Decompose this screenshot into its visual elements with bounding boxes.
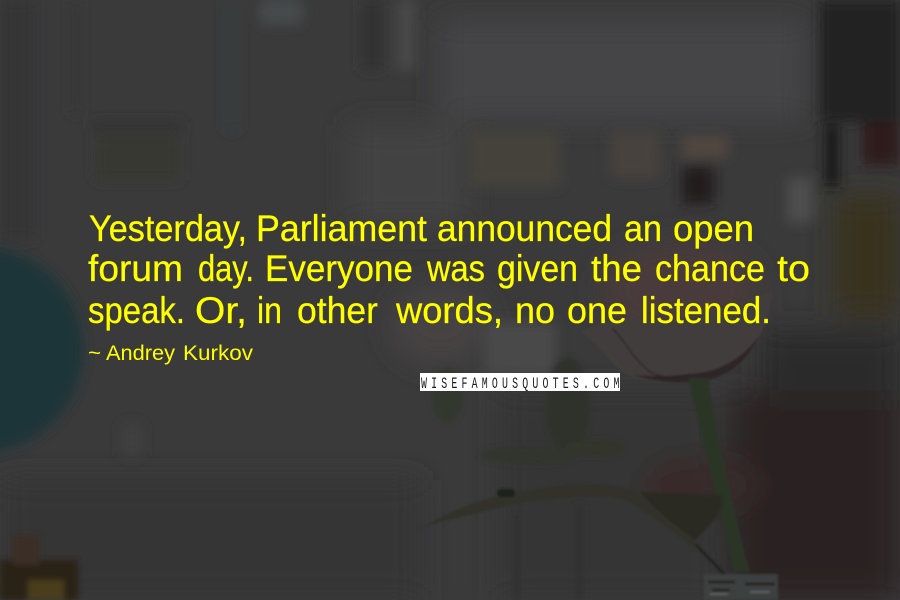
blurred leaves xyxy=(431,357,625,600)
quote text: announced xyxy=(437,208,612,249)
thorny branch with leaf xyxy=(417,484,725,575)
quote text xyxy=(88,208,810,331)
quote text: the xyxy=(591,248,642,289)
quote text: open xyxy=(673,208,754,249)
watermark: WISEFAMOUSQUOTES.COM xyxy=(421,375,619,393)
quote text: words, xyxy=(395,290,503,331)
quote text: given xyxy=(497,248,578,289)
quote text: other xyxy=(297,290,378,331)
quote text: chance xyxy=(655,248,765,289)
quote text: speak. xyxy=(88,290,185,331)
attribution: Andrey xyxy=(106,342,176,365)
attribution: ~ xyxy=(88,342,101,365)
teal sphere at left edge xyxy=(0,247,83,453)
quote text: forum xyxy=(88,248,183,289)
attribution xyxy=(88,342,254,365)
quote text: day. xyxy=(198,248,254,289)
quote text: Everyone xyxy=(265,248,413,289)
quote text: Parliament xyxy=(256,208,428,249)
rose bud xyxy=(582,292,772,382)
rose stem xyxy=(688,378,750,572)
quote text: an xyxy=(624,208,662,249)
quote text: Or, xyxy=(195,290,247,331)
quote text: no xyxy=(515,290,555,331)
quote text: one xyxy=(567,290,627,331)
quote text: was xyxy=(426,248,485,289)
glass vase xyxy=(704,574,778,600)
attribution: Kurkov xyxy=(183,342,254,365)
quote text: to xyxy=(777,248,810,289)
quote text: in xyxy=(257,290,282,331)
quote text: listened. xyxy=(641,290,771,331)
quote text: Yesterday, xyxy=(89,208,247,249)
flowers at lower left corner xyxy=(0,535,78,600)
